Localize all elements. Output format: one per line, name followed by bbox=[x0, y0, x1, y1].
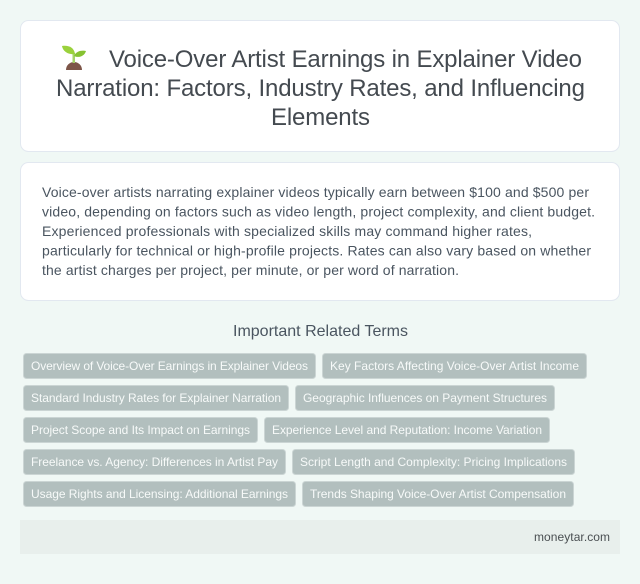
tag: project scope: Project Scope and Its Impact on Earnings bbox=[31, 423, 250, 437]
title text: Voice-Over Artist Earnings in Explainer Video bbox=[109, 46, 582, 73]
tag: experience: Experience Level and Reputation: Income Variation bbox=[272, 423, 542, 437]
tag: project scope bbox=[24, 418, 258, 442]
tag: script length bbox=[292, 450, 574, 474]
tag: standard rates: Standard Industry Rates for Explainer Narration bbox=[31, 391, 281, 405]
description text: particularly for technical or high-profile projects. Rates can also vary based on whether bbox=[42, 242, 591, 258]
title text: Elements bbox=[271, 104, 370, 131]
description text: Voice-over artists narrating explainer videos typically earn between $100 and $500 per bbox=[42, 184, 589, 200]
description text: video, depending on factors such as video length, project complexity, and client budget. bbox=[42, 204, 595, 220]
icon: seedling bbox=[62, 46, 86, 70]
tag: key factors: Key Factors Affecting Voice-Over Artist Income bbox=[330, 359, 579, 373]
tag: trends bbox=[302, 482, 574, 506]
tag: usage rights bbox=[24, 482, 296, 506]
panel: description bbox=[20, 162, 620, 300]
tag: overview bbox=[24, 354, 316, 378]
tag: geographic: Geographic Influences on Payment Structures bbox=[303, 391, 547, 405]
tag: experience bbox=[264, 418, 550, 442]
panel: title bbox=[20, 20, 620, 152]
tag: overview: Overview of Voice-Over Earnings in Explainer Videos bbox=[31, 359, 308, 373]
footer bar bbox=[20, 520, 620, 554]
title text: Narration: Factors, Industry Rates, and Influencing bbox=[56, 75, 585, 102]
tag: freelance bbox=[24, 450, 286, 474]
tag: usage rights: Usage Rights and Licensing: Additional Earnings bbox=[31, 487, 288, 501]
heading: related terms: Important Related Terms bbox=[233, 323, 408, 340]
tag: standard rates bbox=[24, 386, 288, 410]
description text: Experienced professionals with specialized skills may command higher rates, bbox=[42, 223, 532, 239]
tag list bbox=[24, 354, 586, 506]
tag: geographic bbox=[296, 386, 554, 410]
tag: freelance: Freelance vs. Agency: Differences in Artist Pay bbox=[31, 455, 278, 469]
description text: the artist charges per project, per minute, or per word of narration. bbox=[42, 262, 459, 278]
tag: key factors bbox=[322, 354, 586, 378]
tag: trends: Trends Shaping Voice-Over Artist Compensation bbox=[310, 487, 566, 501]
footer text: moneytar.com bbox=[534, 530, 610, 544]
tag: script length: Script Length and Complexity: Pricing Implications bbox=[300, 455, 567, 469]
